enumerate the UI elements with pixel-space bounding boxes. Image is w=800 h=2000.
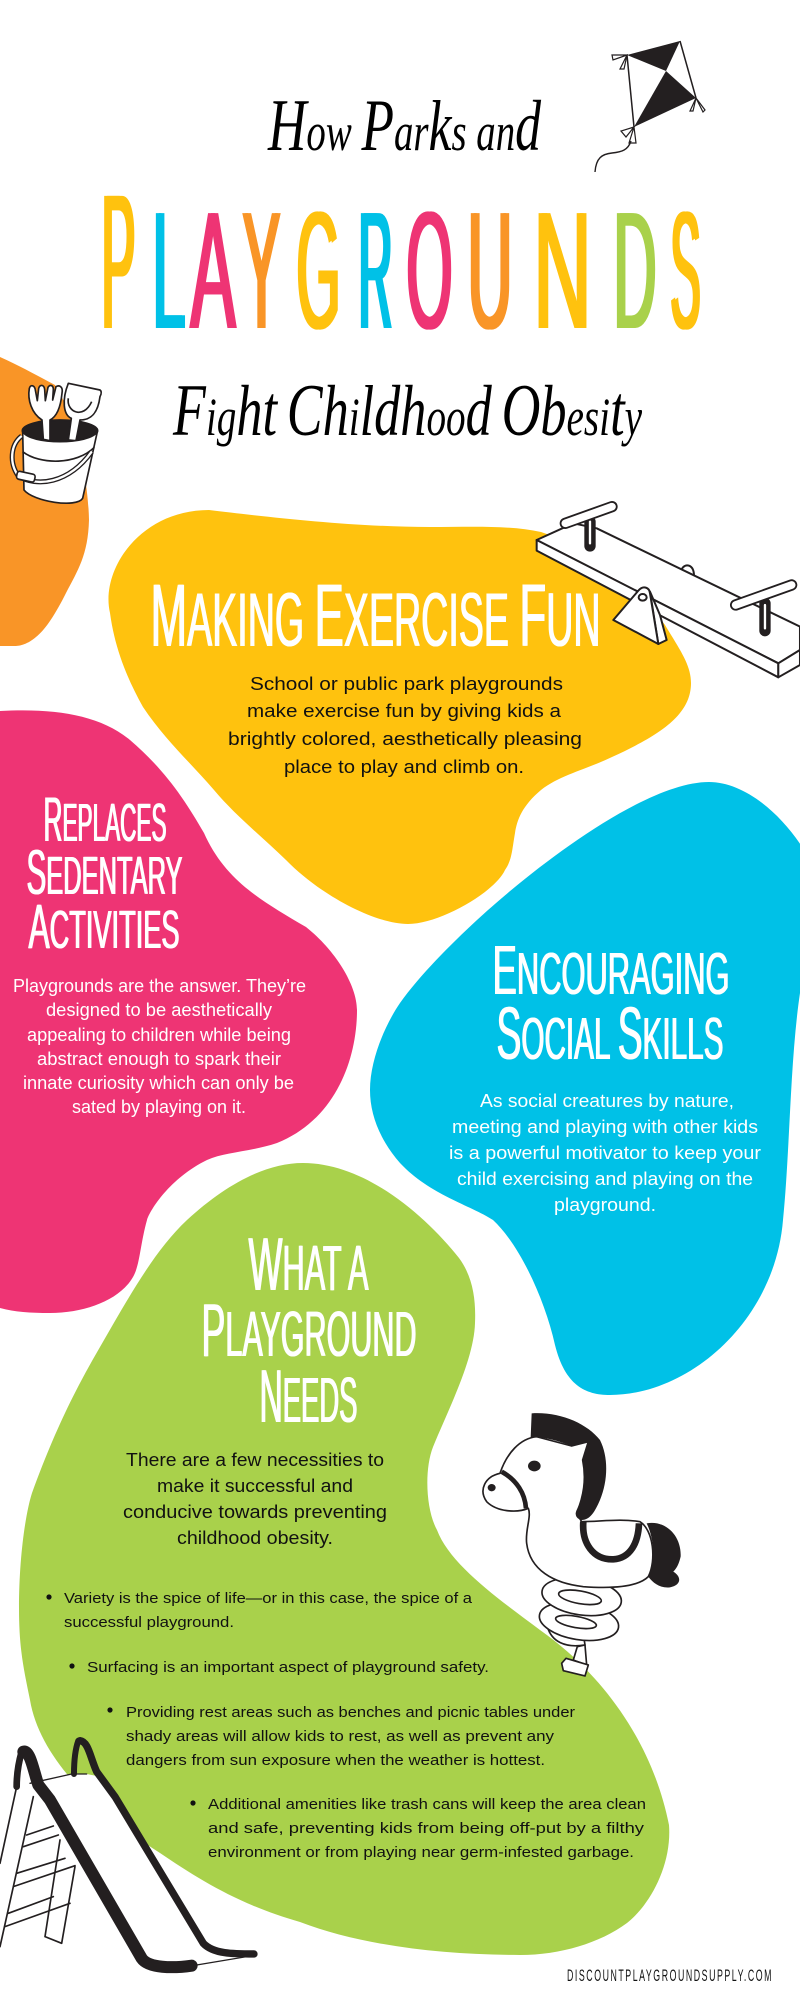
title: PLAYGROUNDS: L	[151, 178, 184, 364]
list item: amenities: environment or from playing near germ-infested garbage.	[208, 1844, 634, 1861]
text block: what a playground needs intro: make it successful and	[157, 1475, 353, 1496]
icon: kite	[595, 41, 705, 172]
text block: what a playground needs intro	[123, 1449, 387, 1548]
title: PLAYGROUNDS: U	[466, 178, 511, 364]
list item: rest areas	[107, 1704, 575, 1769]
text block: what a playground needs intro: childhood obesity.	[177, 1527, 333, 1548]
yellow blob	[108, 510, 691, 924]
list item: amenities	[190, 1796, 646, 1861]
heading: what a playground needs: PLAYGROUND	[201, 1288, 416, 1372]
text block: making exercise fun body	[228, 673, 582, 777]
list item: rest areas: Providing rest areas such as benches and picnic tables under	[126, 1704, 575, 1721]
text block: replaces sedentary body: Playgrounds are the answer. They’re	[13, 976, 306, 996]
green blob	[19, 1163, 669, 1955]
text block: what a playground needs intro: There are a few necessities to	[126, 1449, 384, 1470]
icon: spring rider horse	[483, 1413, 681, 1676]
heading: what a playground needs: WHAT A	[248, 1222, 368, 1306]
text block: encouraging social skills body: playground.	[554, 1194, 656, 1215]
title: PLAYGROUNDS	[100, 154, 699, 369]
text block: making exercise fun body: make exercise fun by giving kids a	[247, 700, 562, 721]
icon: seesaw	[537, 507, 800, 677]
title: PLAYGROUNDS: O	[405, 178, 451, 364]
pink blob	[0, 710, 357, 1313]
list item: rest areas: shady areas will allow kids to rest, as well as prevent any	[126, 1728, 555, 1745]
list item: amenities: Additional amenities like trash cans will keep the area clean	[208, 1796, 646, 1813]
title: How Parks and: How Parks and	[267, 85, 542, 167]
heading: replaces sedentary activities: SEDENTARY	[26, 838, 182, 908]
text block: encouraging social skills body: meeting and playing with other kids	[452, 1116, 758, 1137]
panel: encouraging social skills	[370, 782, 800, 1395]
text: S	[669, 178, 699, 364]
text block: what a playground needs intro: conducive towards preventing	[123, 1501, 387, 1522]
text block: making exercise fun body: School or public park playgrounds	[250, 673, 563, 694]
title: PLAYGROUNDS: Y	[241, 178, 279, 364]
heading: replaces sedentary activities	[26, 785, 182, 962]
icon: slide	[0, 1741, 257, 1967]
title: PLAYGROUNDS: A	[189, 178, 234, 364]
text block: making exercise fun body: place to play and climb on.	[284, 756, 524, 777]
list item: variety	[46, 1590, 473, 1631]
panel: what a playground needs	[19, 1163, 669, 1955]
text block: replaces sedentary body: abstract enough to spark their	[37, 1049, 281, 1069]
text block: replaces sedentary body: appealing to children while being	[27, 1025, 291, 1045]
panel: replaces sedentary activities	[0, 710, 357, 1313]
text block: replaces sedentary body: innate curiosity which can only be	[23, 1073, 294, 1093]
text block: making exercise fun body: brightly colored, aesthetically pleasing	[228, 728, 582, 749]
blue blob	[370, 782, 800, 1395]
title: PLAYGROUNDS: G	[295, 178, 339, 364]
list item: amenities: and safe, preventing kids from being off-put by a filthy	[208, 1820, 645, 1837]
list item: rest areas: dangers from sun exposure when the weather is hottest.	[126, 1752, 545, 1769]
heading: what a playground needs: NEEDS	[259, 1354, 357, 1438]
heading: making exercise fun: MAKING EXERCISE FUN	[150, 565, 600, 665]
text block: encouraging social skills body	[449, 1090, 761, 1215]
title: PLAYGROUNDS: N	[532, 178, 590, 364]
list item: variety: Variety is the spice of life—or in this case, the spice of a	[64, 1590, 473, 1607]
heading: what a playground needs	[201, 1222, 416, 1438]
text block: encouraging social skills body: As social creatures by nature,	[480, 1090, 734, 1111]
heading: replaces sedentary activities: REPLACES	[43, 785, 166, 855]
heading: encouraging social skills	[492, 931, 729, 1075]
text block: encouraging social skills body: child exercising and playing on the	[457, 1168, 753, 1189]
list item: surfacing: Surfacing is an important aspect of playground safety.	[87, 1659, 489, 1676]
title: PLAYGROUNDS: R	[357, 178, 391, 364]
text block: encouraging social skills body: is a powerful motivator to keep your	[449, 1142, 761, 1163]
title: PLAYGROUNDS: P	[100, 154, 134, 369]
heading: encouraging social skills: SOCIAL SKILLS	[496, 992, 723, 1075]
decorative shape: orange blob	[0, 357, 89, 646]
text block: replaces sedentary body	[13, 976, 306, 1117]
text block: replaces sedentary body: sated by playing on it.	[72, 1097, 246, 1117]
list item: variety: successful playground.	[64, 1614, 234, 1631]
heading: replaces sedentary activities: ACTIVITIES	[28, 892, 179, 962]
icon: bucket with fork and shovel	[12, 383, 101, 503]
text block: replaces sedentary body: designed to be aesthetically	[46, 1000, 272, 1020]
title: PLAYGROUNDS: D	[612, 178, 655, 364]
panel: making exercise fun	[108, 510, 691, 924]
title: Fight Childhood Obesity: Fight Childhood Obesity	[172, 370, 642, 452]
